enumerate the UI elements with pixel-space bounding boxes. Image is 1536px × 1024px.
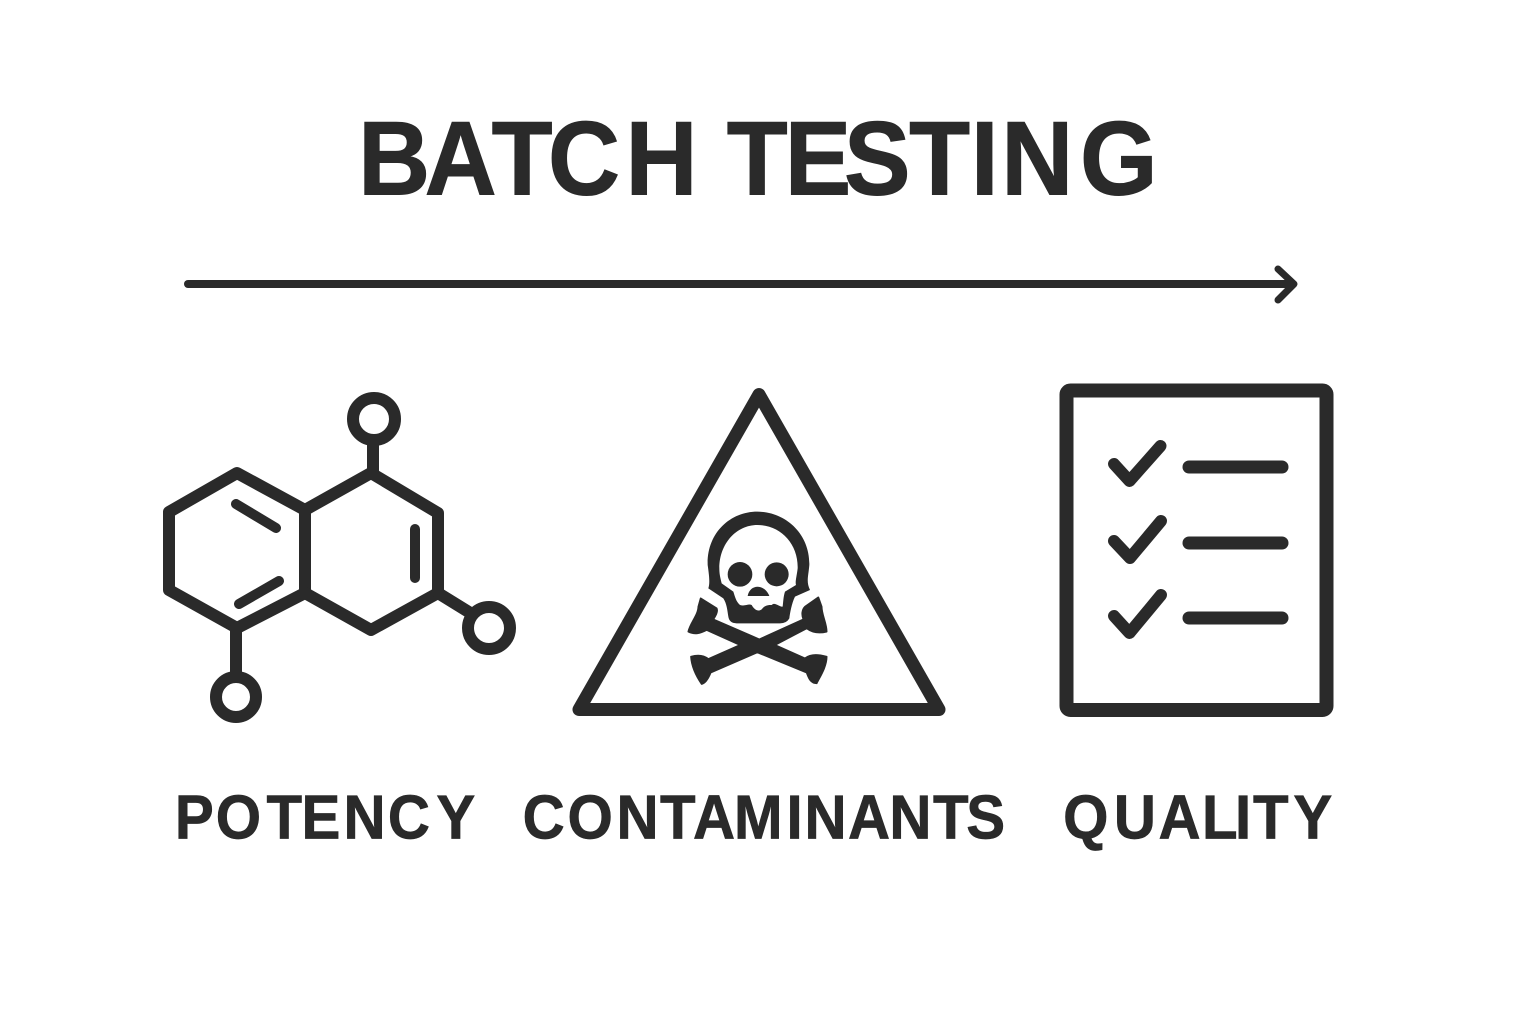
icon: warning triangle with skull and crossbones (contaminants) (579, 394, 939, 710)
check marks (1114, 446, 1161, 633)
label: contaminants: CONTAMINANTS (523, 783, 1005, 852)
label: potency: POTENCY (175, 783, 475, 852)
icon: checklist (quality) (1066, 390, 1326, 710)
title: BATCH TESTING (358, 99, 1158, 217)
checklist frame (1066, 390, 1326, 710)
label: quality: QUALITY (1063, 783, 1332, 852)
warning triangle (579, 394, 939, 710)
skull and crossbones (688, 512, 827, 684)
icon: molecule (potency) (169, 398, 510, 717)
checklist lines (1189, 467, 1282, 618)
arrow: process direction (188, 269, 1294, 300)
